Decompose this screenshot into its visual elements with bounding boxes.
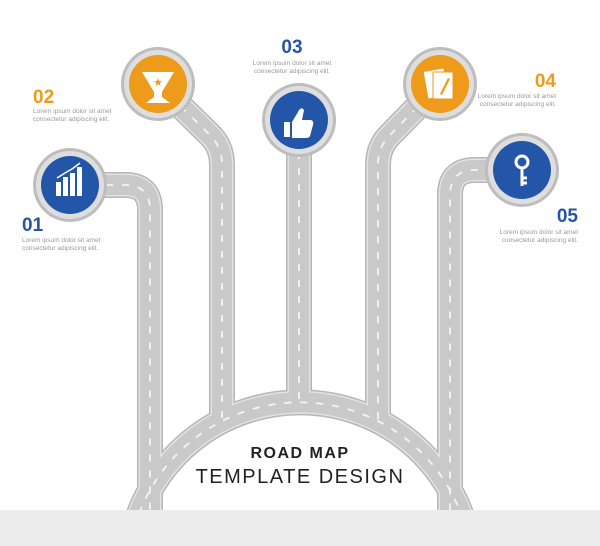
circle 5 bbox=[485, 133, 559, 207]
label 03: consectetur adipiscing elit. bbox=[254, 68, 330, 75]
icon: thumbs up bbox=[284, 108, 313, 138]
icon: bar chart bbox=[56, 163, 82, 196]
circle 1 bbox=[33, 148, 107, 222]
title: TEMPLATE DESIGN bbox=[196, 466, 404, 488]
icon: trophy: ★ bbox=[153, 77, 163, 89]
label 04: consectetur adipiscing elit. bbox=[480, 101, 556, 108]
label 05: consectetur adipiscing elit. bbox=[502, 237, 578, 244]
label 01: consectetur adipiscing elit. bbox=[22, 245, 98, 252]
label 02 bbox=[33, 87, 112, 123]
label 03: 03 bbox=[281, 37, 303, 58]
label 04: Lorem ipsum dolor sit amet bbox=[478, 93, 556, 100]
label 01: Lorem ipsum dolor sit amet bbox=[22, 237, 101, 244]
label 01 bbox=[22, 215, 101, 252]
label 02: Lorem ipsum dolor sit amet bbox=[33, 108, 112, 115]
label 05: Lorem ipsum dolor sit amet bbox=[500, 229, 578, 236]
icon: notes bbox=[424, 68, 453, 99]
label 05 bbox=[500, 206, 578, 244]
title: ROAD MAP bbox=[250, 445, 350, 462]
label 02: consectetur adipiscing elit. bbox=[33, 116, 109, 123]
label 03: Lorem ipsum dolor sit amet bbox=[253, 60, 331, 67]
circle 3 bbox=[262, 83, 336, 157]
label 05: 05 bbox=[557, 206, 578, 227]
roads bbox=[90, 84, 510, 546]
label 03 bbox=[253, 37, 331, 75]
bottom band bbox=[0, 510, 600, 546]
label 02: 02 bbox=[33, 87, 54, 108]
icon: key bbox=[516, 156, 528, 186]
label 04: 04 bbox=[535, 71, 556, 92]
label 01: 01 bbox=[22, 215, 44, 236]
circle 2 bbox=[121, 47, 195, 121]
label 04 bbox=[478, 71, 556, 108]
circle 4 bbox=[403, 47, 477, 121]
title bbox=[196, 445, 404, 488]
